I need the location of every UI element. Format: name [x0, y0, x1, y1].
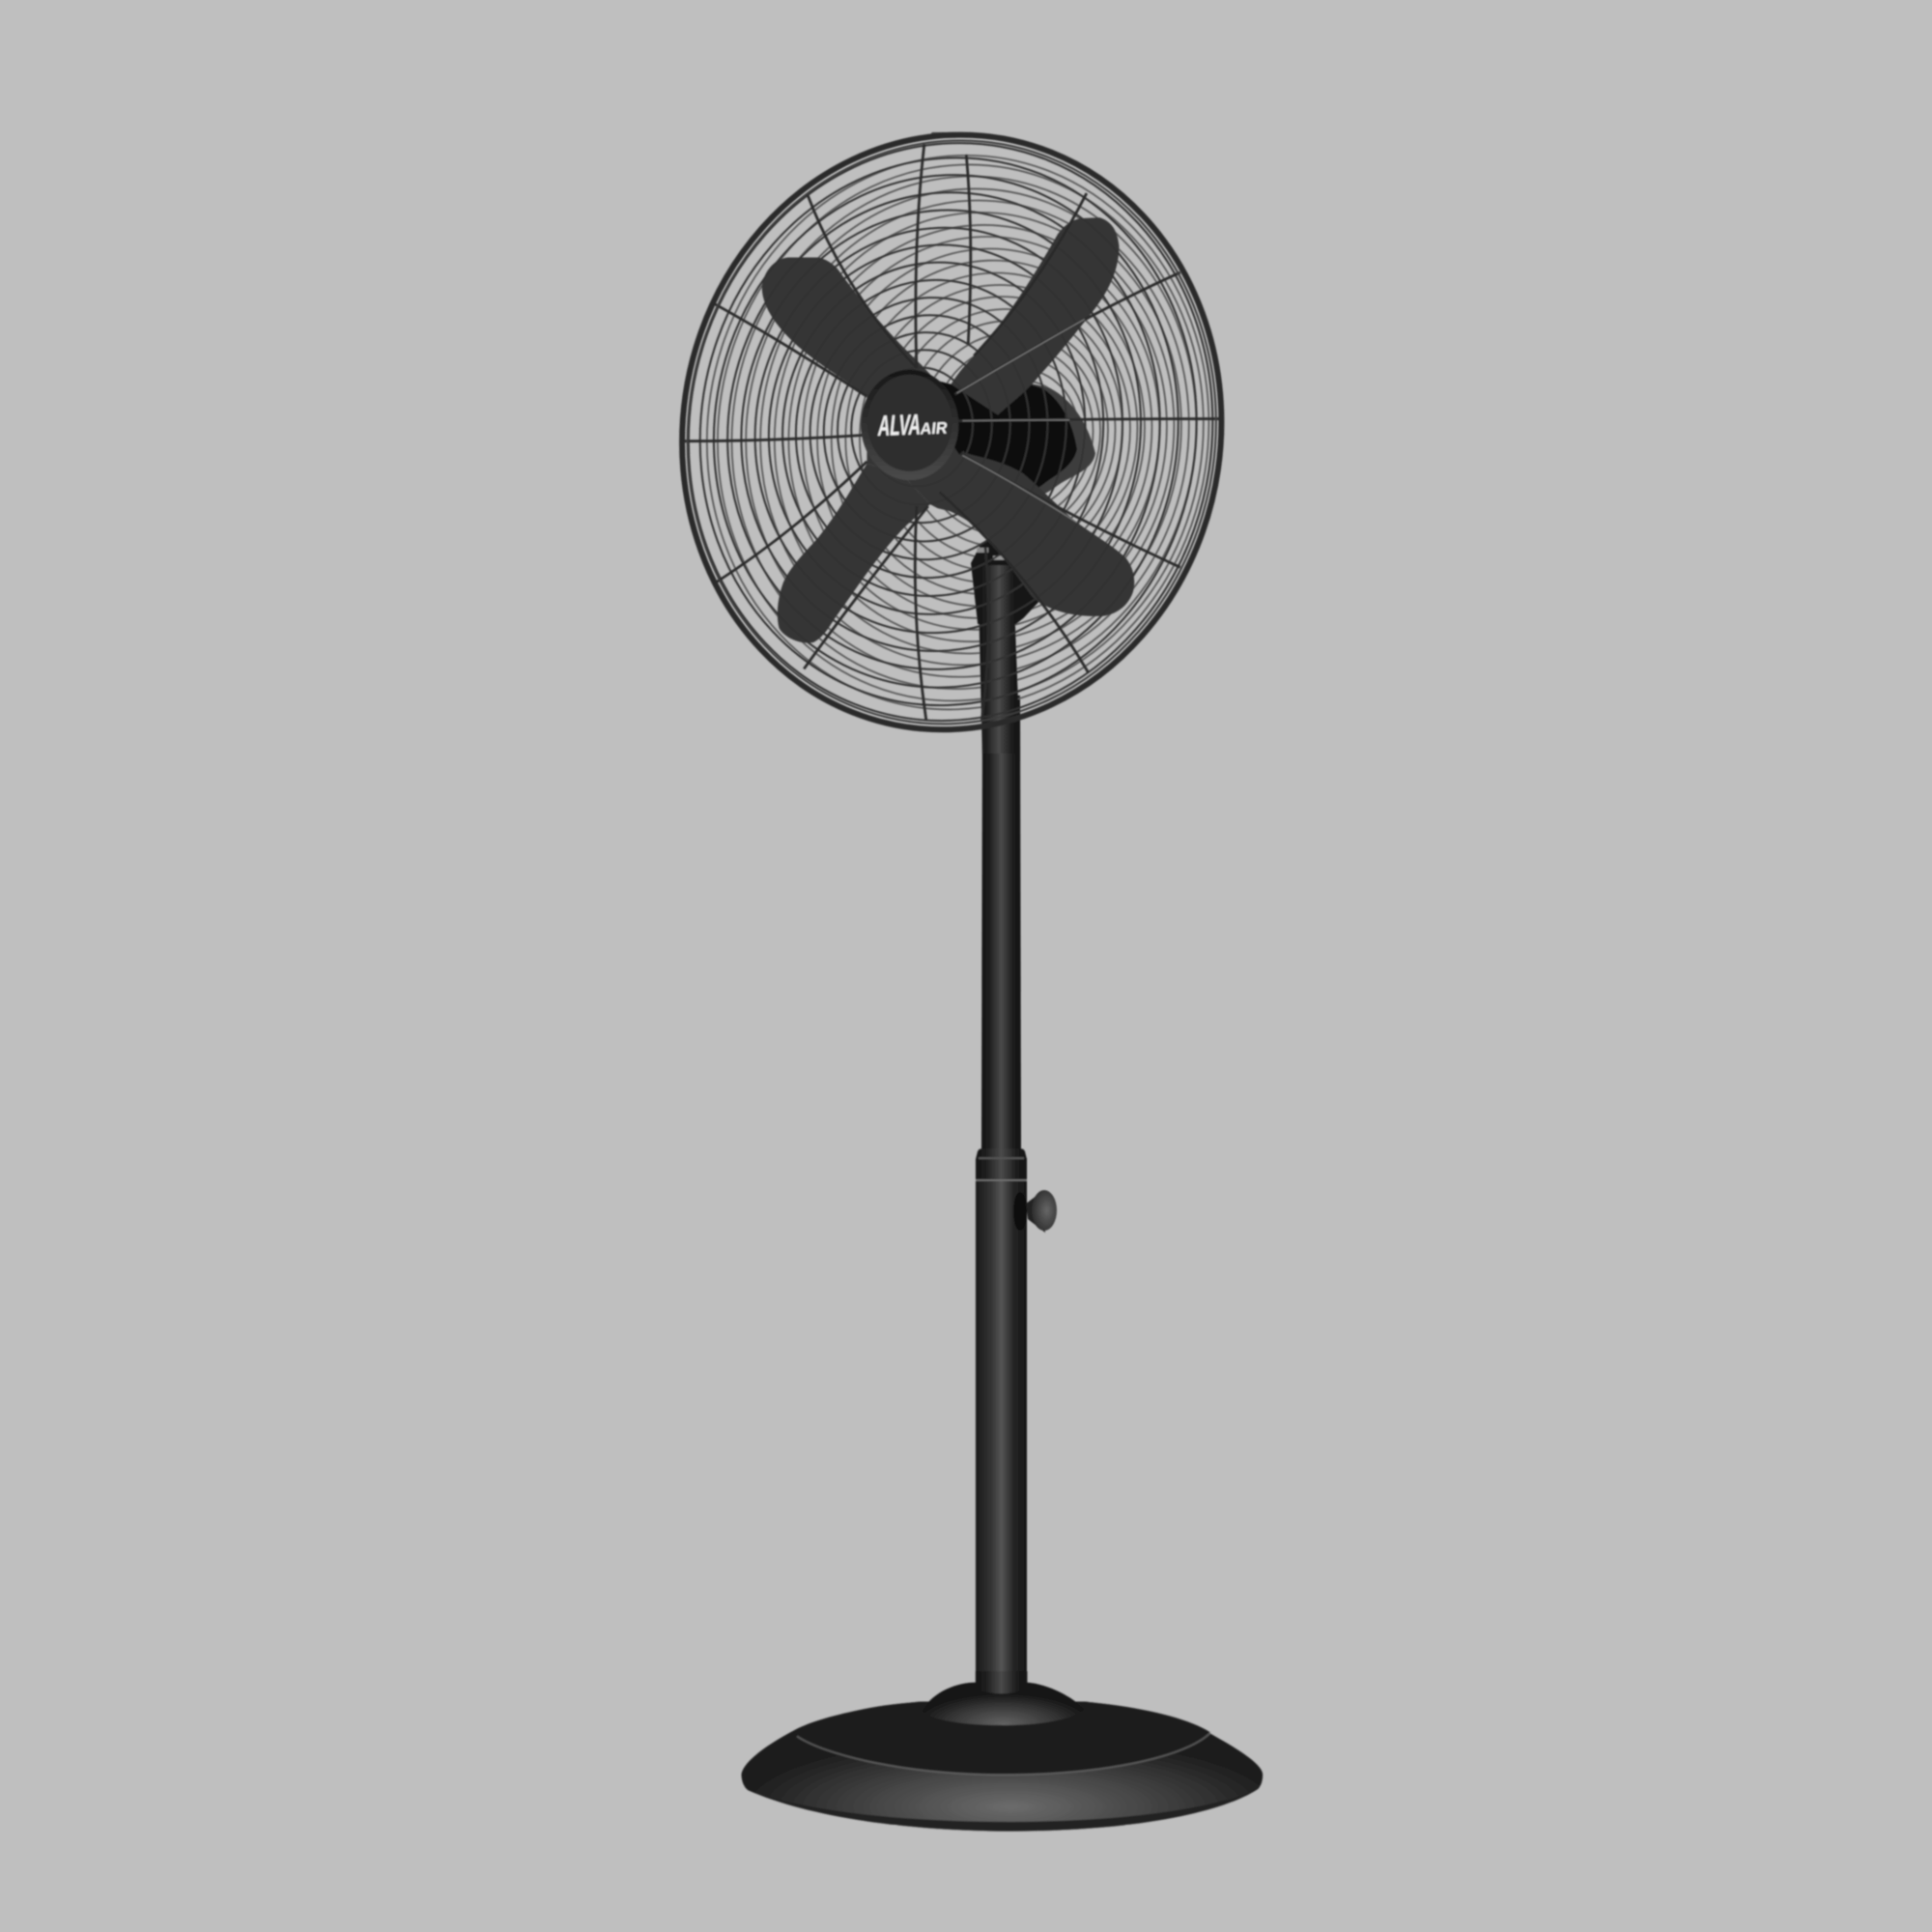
- base outer silhouette: [742, 1702, 1263, 1832]
- dark wedge between hub and motor: [936, 381, 1001, 455]
- pole foot: [976, 1671, 1027, 1693]
- post behind front grille: [978, 565, 1020, 753]
- pole collar: [976, 1149, 1027, 1180]
- pedestal fan: [682, 125, 1263, 1832]
- light spoke highlights: [956, 319, 1085, 523]
- motor housing: [940, 380, 1077, 507]
- base dome: [922, 1683, 1085, 1725]
- round weighted base: [742, 1671, 1263, 1832]
- blade: upper right: [951, 217, 1119, 429]
- top mounting tab: [931, 132, 957, 138]
- pole: upper telescoping tube: [981, 696, 1021, 1154]
- hub logo: ALVA AIR: ALVAAIR: [876, 409, 950, 442]
- blade: lower right: [938, 451, 1134, 616]
- height adjustment knob: [1013, 1190, 1057, 1233]
- base bottom edge: [748, 1789, 1259, 1832]
- hub cap: [861, 370, 958, 480]
- neck joint: [971, 539, 1038, 624]
- pole: lower tube: [976, 1180, 1027, 1700]
- base upper plate: [796, 1702, 1210, 1775]
- blade root plate: [867, 364, 966, 512]
- front grille rings: [689, 133, 1212, 730]
- blade: upper left: [762, 257, 921, 399]
- motor housing shadow edge: [940, 380, 1095, 510]
- grille spokes: [682, 144, 1219, 722]
- outer rim: [682, 125, 1221, 739]
- fan head: [682, 125, 1221, 753]
- base ring highlight: [797, 1733, 1210, 1775]
- rear grille rings: [707, 146, 1208, 719]
- blade: lower left: [778, 464, 930, 642]
